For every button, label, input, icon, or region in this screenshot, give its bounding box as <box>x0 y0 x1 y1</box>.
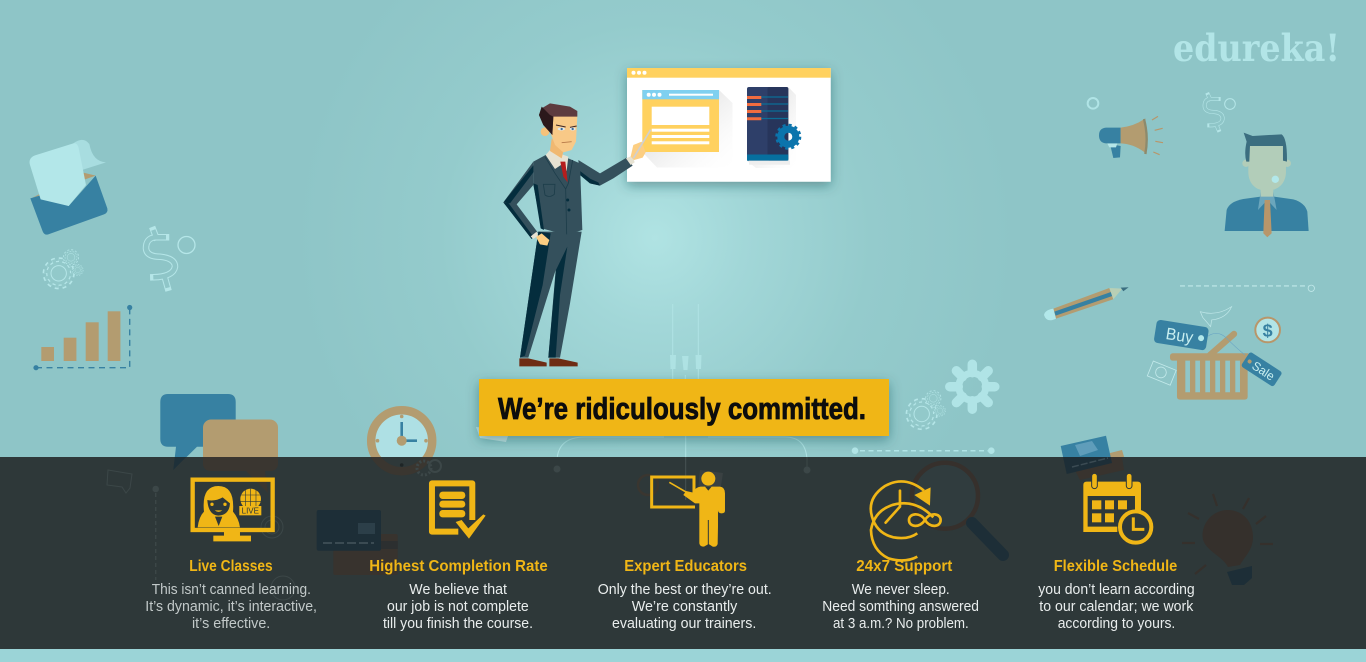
icon: checklist document <box>432 483 486 539</box>
bottom strip <box>0 649 1366 662</box>
heading: Expert Educators <box>624 558 747 575</box>
description: It’s dynamic, it’s interactive, <box>145 599 317 615</box>
description <box>598 582 772 632</box>
decorative plugs and circuit <box>554 304 810 474</box>
icon: megaphone <box>1099 116 1163 158</box>
icon: live class monitor <box>193 480 273 541</box>
icon: pencil <box>1044 287 1129 320</box>
description <box>1038 582 1195 632</box>
description: evaluating our trainers. <box>612 616 756 632</box>
logo: edureka: edureka! <box>1173 26 1340 70</box>
feature: Highest Completion Rate <box>369 483 548 632</box>
icon: dollar coin <box>1255 318 1280 342</box>
icon: outline gears centre <box>908 391 945 428</box>
icon: dollar coin: $ <box>1263 321 1273 341</box>
icon: shopping basket <box>1147 307 1250 400</box>
description: Only the best or they’re out. <box>598 582 772 598</box>
description <box>383 582 533 632</box>
icon: solid gear <box>950 364 995 409</box>
feature: Flexible Schedule <box>1038 473 1195 632</box>
description: our job is not complete <box>387 599 529 615</box>
tag: Sale: Sale <box>1249 359 1277 384</box>
head <box>539 103 577 158</box>
feature: Live Classes <box>145 480 317 632</box>
feature: 24x7 Support <box>822 481 979 632</box>
jacket and arms <box>503 155 633 239</box>
tag: Sale <box>1241 352 1283 387</box>
tag: Buy <box>1153 319 1209 351</box>
panel: dark feature band <box>0 457 1366 649</box>
icon: outline gears left <box>45 250 83 287</box>
description: at 3 a.m.? No problem. <box>833 616 969 632</box>
icon: live class monitor: LIVE <box>242 507 259 516</box>
description: We’re constantly <box>632 599 738 615</box>
description: We believe that <box>409 582 507 598</box>
icon: outline dollar with circle <box>146 230 195 288</box>
description: till you finish the course. <box>383 616 533 632</box>
icon: businessman avatar <box>1225 133 1309 237</box>
title banner <box>476 379 889 442</box>
title banner: We’re ridiculously committed. <box>498 391 866 426</box>
description <box>822 582 979 632</box>
description: to our calendar; we work <box>1039 599 1194 615</box>
heading: Live Classes <box>189 558 273 575</box>
faint objects behind band <box>106 457 1273 600</box>
description: you don’t learn according <box>1038 582 1195 598</box>
description: We never sleep. <box>852 582 950 598</box>
illustration: presentation window <box>627 68 831 182</box>
heading: Flexible Schedule <box>1054 558 1178 575</box>
trousers <box>520 232 582 358</box>
dashed connector <box>1180 285 1314 291</box>
shirt and tie <box>546 150 568 182</box>
heading: Highest Completion Rate <box>369 558 548 575</box>
tag: Buy: Buy <box>1165 324 1195 347</box>
description <box>145 582 317 632</box>
icon: teacher at board <box>652 472 725 547</box>
right-hand icons <box>1044 95 1314 400</box>
hands and pointer <box>531 130 651 246</box>
feature: Expert Educators <box>598 472 772 632</box>
description: Need somthing answered <box>822 599 979 615</box>
icon: calendar with clock <box>1083 473 1151 543</box>
description: This isn’t canned learning. <box>152 582 311 598</box>
icon: clock with infinity loop <box>871 481 941 560</box>
icon: envelope with letter <box>30 140 108 235</box>
icon: small dollar <box>1205 95 1235 130</box>
description: according to yours. <box>1058 616 1175 632</box>
chart: growth bars <box>33 305 132 370</box>
icon: speech bubbles <box>160 394 278 472</box>
shoes <box>519 358 578 366</box>
description: it’s effective. <box>192 616 270 632</box>
icon: credit cards <box>1061 436 1125 474</box>
icon: wall clock <box>371 410 432 471</box>
decorative dashed connector centre <box>852 447 995 454</box>
icon: small ring <box>1088 98 1098 109</box>
heading: 24x7 Support <box>856 558 952 575</box>
illustration: presenter in suit <box>503 103 651 366</box>
